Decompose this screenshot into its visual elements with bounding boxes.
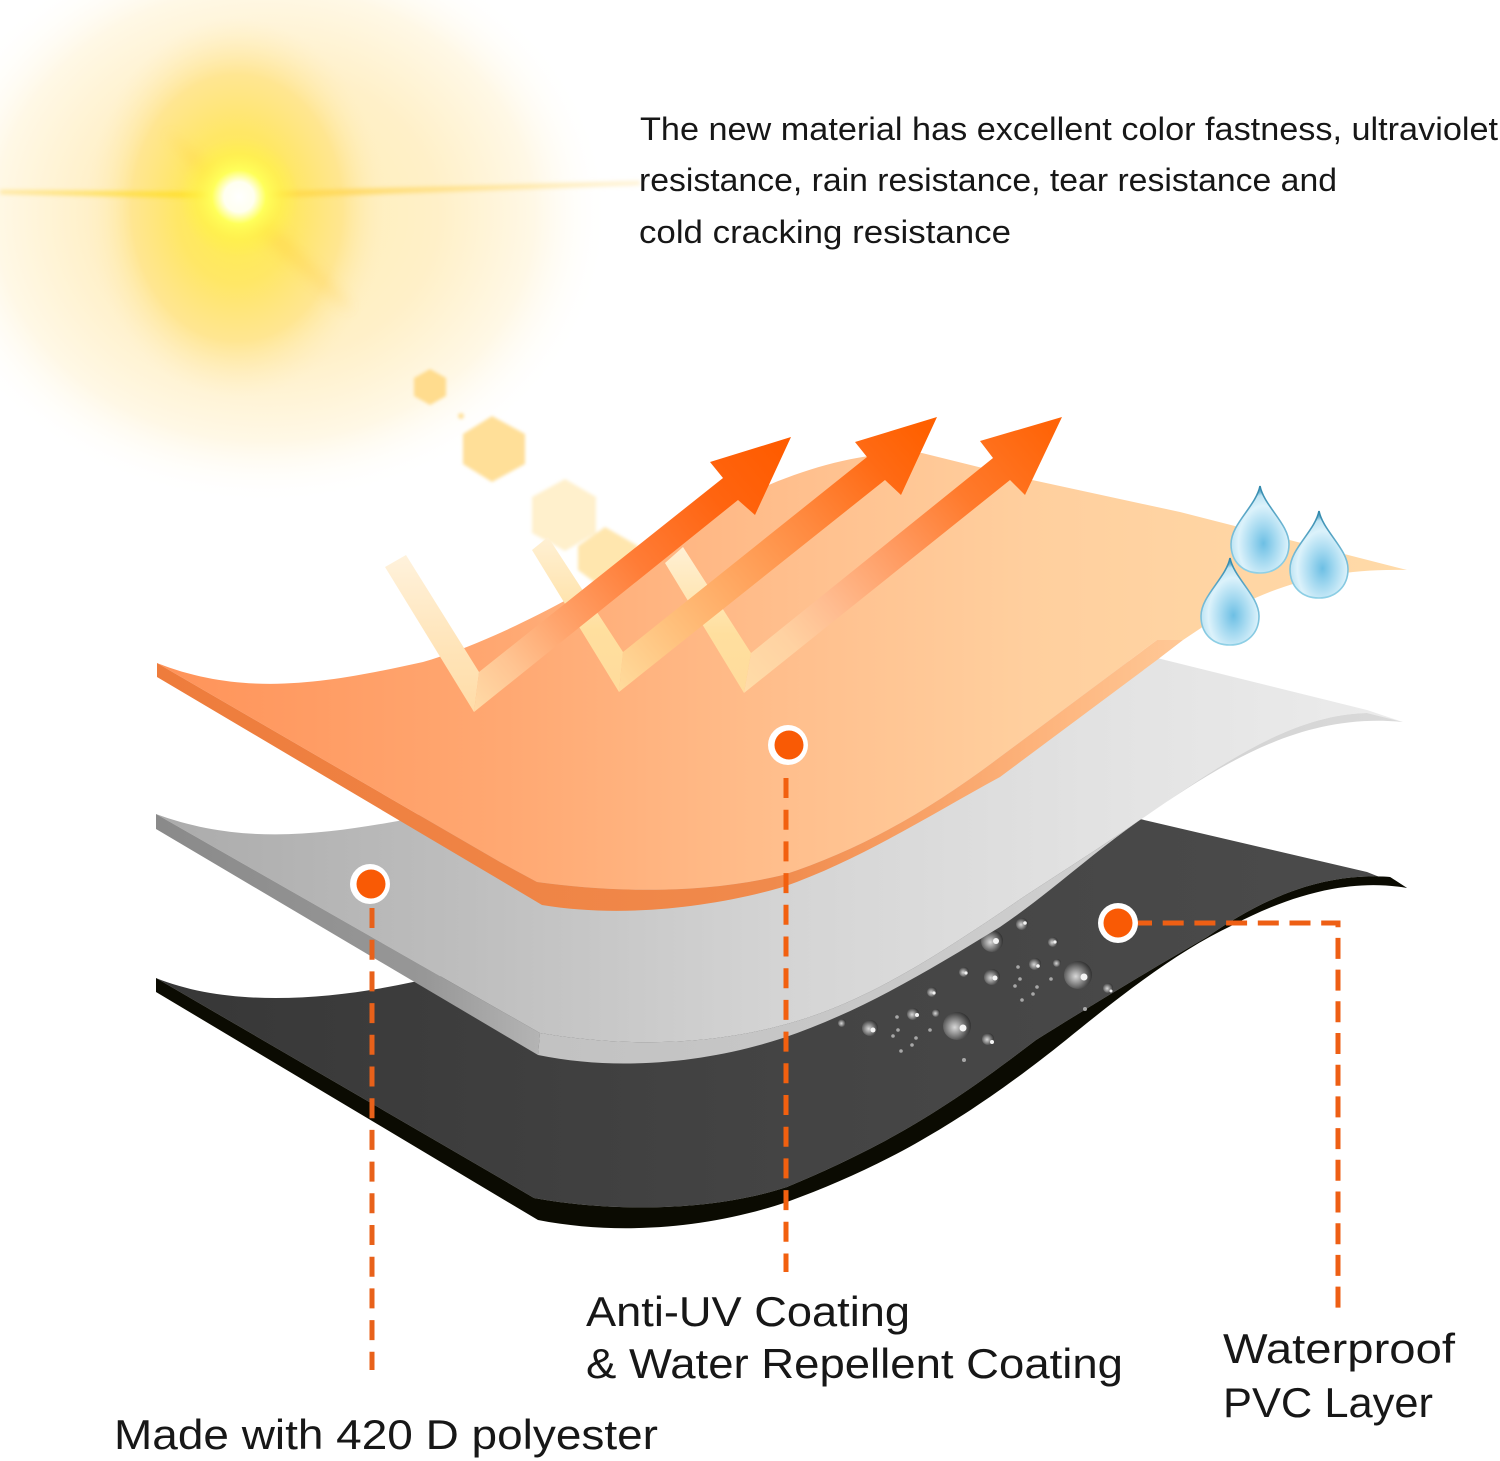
arrow: UV reflected left [385, 437, 791, 712]
icon: water drops [1201, 486, 1348, 645]
water beads on black sheet [838, 918, 1113, 1062]
text: material description: The new material has excellent color fastness, ultraviolet [640, 111, 1498, 147]
callout line: polyester [370, 908, 374, 1370]
grey sheet lower edge [538, 713, 1403, 1063]
marker: polyester [350, 864, 390, 904]
layer: grey polyester sheet [156, 658, 1403, 1063]
label: waterproof PVC layer: PVC Layer [1223, 1379, 1433, 1426]
grey sheet left edge [156, 814, 540, 1055]
label: polyester: Made with 420 D polyester [114, 1411, 658, 1458]
marker: anti-UV coating [768, 725, 808, 765]
layer: black PVC sheet [156, 819, 1407, 1228]
layer: orange anti-UV coating [157, 453, 1407, 911]
label: anti-UV coating [586, 1288, 1123, 1387]
arrow: UV reflected right [665, 417, 1062, 693]
label: anti-UV coating: & Water Repellent Coating [586, 1340, 1123, 1387]
arrow: UV reflected middle [532, 417, 937, 692]
label: anti-UV coating: Anti-UV Coating [586, 1288, 910, 1335]
label: waterproof PVC layer: Waterproof [1223, 1325, 1455, 1372]
callout line: anti-UV coating [784, 778, 788, 1272]
black sheet dark edge [156, 876, 1407, 1228]
callout line: PVC layer [1131, 923, 1338, 1315]
marker: PVC layer [1098, 903, 1138, 943]
text: material description [639, 111, 1498, 250]
icon: glowing sun [0, 0, 640, 505]
hexagon lens flares [414, 369, 638, 590]
text: material description: resistance, rain resistance, tear resistance and [639, 162, 1337, 198]
text: material description: cold cracking resistance [639, 214, 1011, 250]
label: waterproof PVC layer [1223, 1325, 1455, 1426]
orange sheet lower edge [157, 640, 1183, 911]
